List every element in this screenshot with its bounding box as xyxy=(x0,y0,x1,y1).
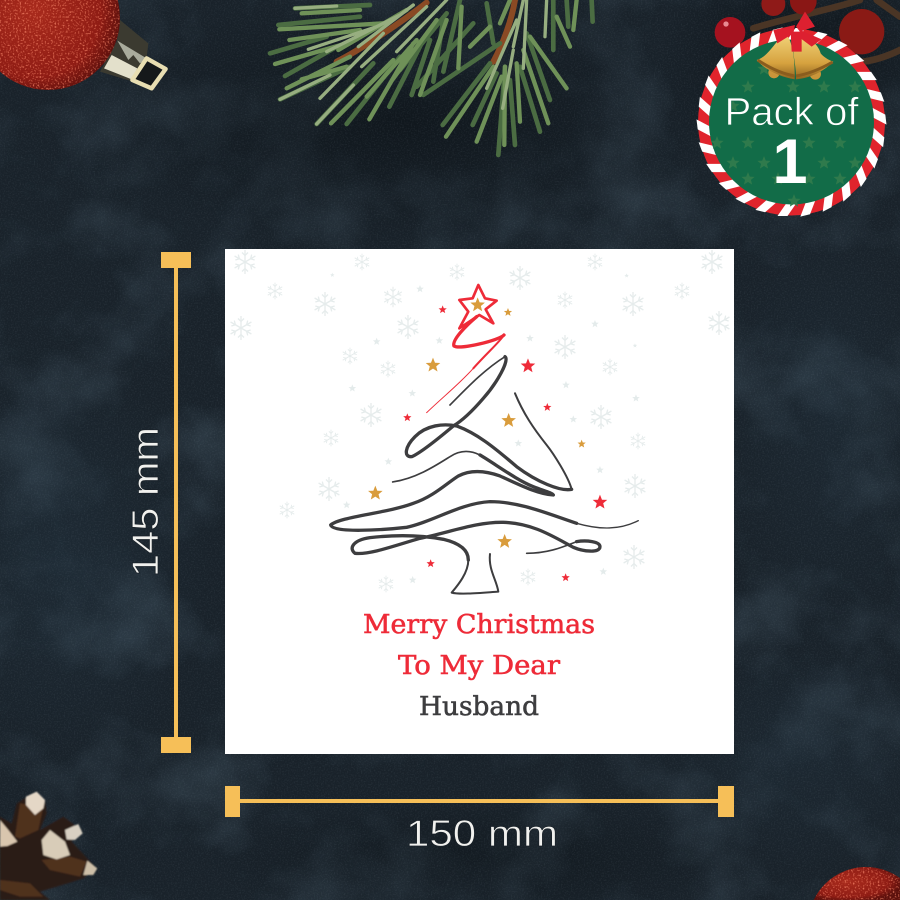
width dimension: ruler and 150 mm label xyxy=(225,786,734,854)
card message: Merry Christmas xyxy=(363,610,595,640)
ornament: red glitter bauble bottom right xyxy=(814,867,900,900)
tree: red top swirl xyxy=(427,285,504,413)
badge: faint star pattern xyxy=(710,62,862,207)
badge number: 1 xyxy=(772,127,808,197)
card message xyxy=(363,610,595,722)
width dimension: ruler and 150 mm label: 150 mm xyxy=(406,813,558,854)
pine cone bottom left xyxy=(0,792,97,900)
red berries and twigs top right xyxy=(715,0,900,62)
icon: golden bells with red bow xyxy=(757,12,833,80)
badge: pack of 1 xyxy=(696,12,887,217)
christmas tree line art xyxy=(330,273,640,594)
card message: To My Dear xyxy=(398,651,561,681)
candy stripe ring xyxy=(696,27,887,217)
bauble cap and loop xyxy=(100,20,166,88)
card xyxy=(225,249,734,754)
ornament: red glitter bauble top left xyxy=(0,0,166,90)
pine branch top centre xyxy=(270,0,593,155)
height dimension: ruler and 145 mm label: 145 mm xyxy=(125,427,166,577)
badge text: pack of: Pack of xyxy=(724,91,859,134)
card message: Husband xyxy=(419,692,539,722)
tree: pale background stars xyxy=(330,273,640,583)
height dimension: ruler and 145 mm label xyxy=(125,252,191,753)
tree: dark line swirls xyxy=(331,357,638,594)
tree: stars xyxy=(368,297,607,581)
snowflake pattern xyxy=(231,250,729,592)
